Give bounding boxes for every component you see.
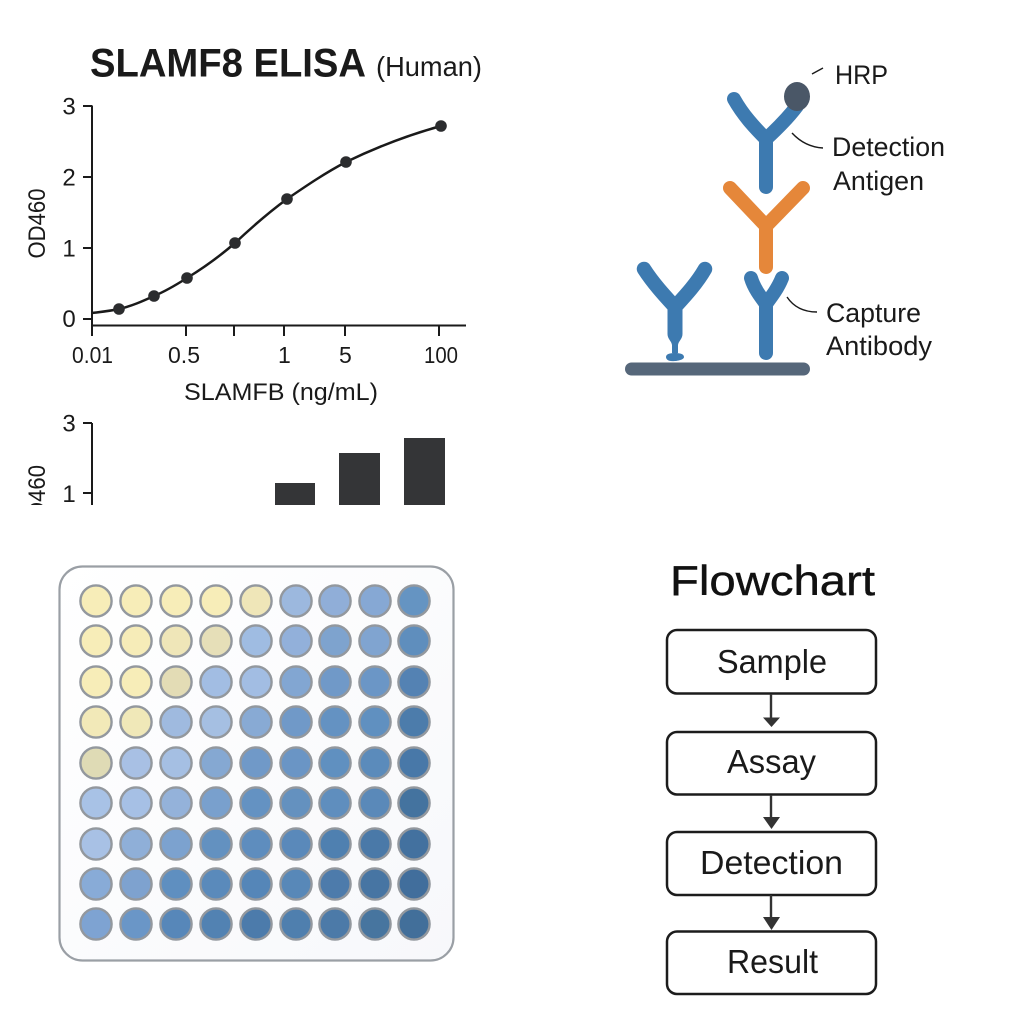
x axis xyxy=(92,326,466,336)
title: SLAMF8 ELISA xyxy=(90,42,366,86)
step: Assay xyxy=(667,732,876,794)
label: Detection Antigen xyxy=(792,132,945,196)
antigen xyxy=(730,188,803,267)
label: HRP xyxy=(812,60,888,90)
step: Result: Result xyxy=(727,943,818,980)
line chart: standard curve xyxy=(24,94,466,406)
y tick labels: 3 xyxy=(62,94,76,120)
y axis xyxy=(83,106,92,336)
arrow: Detection to Result xyxy=(763,895,780,930)
label: Capture Antibody: Antibody xyxy=(826,331,933,361)
label: Capture Antibody xyxy=(787,297,933,361)
label: Detection Antigen: Detection xyxy=(832,132,945,162)
y tick labels: 1 xyxy=(62,236,76,262)
label: Capture Antibody: Capture xyxy=(826,298,921,328)
label: HRP: HRP xyxy=(835,60,888,90)
bar chart tick labels: 3 xyxy=(62,410,76,438)
title: (Human) xyxy=(376,51,482,82)
x tick labels: 5 xyxy=(339,342,352,368)
bars xyxy=(275,438,445,505)
x axis title: SLAMFB (ng/mL) xyxy=(184,379,378,406)
x tick labels: 0.5 xyxy=(168,342,200,368)
immobilised capture antibody xyxy=(644,269,705,361)
x tick labels: 100 xyxy=(424,342,458,368)
bar chart: cropped xyxy=(28,414,445,505)
step: Assay: Assay xyxy=(727,743,816,780)
bar chart tick labels xyxy=(63,414,75,502)
x tick labels: 0.01 xyxy=(72,342,113,368)
label: Detection Antigen: Antigen xyxy=(833,166,924,196)
curve xyxy=(92,126,441,313)
96-well plate xyxy=(60,566,454,960)
HRP enzyme xyxy=(784,82,810,111)
y tick labels: 2 xyxy=(62,164,76,192)
capture antibody xyxy=(751,278,782,353)
step: Sample: Sample xyxy=(717,643,827,680)
sandwich ELISA diagram xyxy=(625,60,945,376)
wells xyxy=(80,585,430,940)
data points xyxy=(113,120,447,315)
arrow: Sample to Assay xyxy=(763,694,780,727)
y axis title: OD460 xyxy=(24,188,51,258)
bar chart y axis title: OD460 xyxy=(24,465,51,535)
plate surface xyxy=(625,362,810,376)
flowchart heading: Flowchart xyxy=(670,557,875,604)
step: Result xyxy=(667,932,876,994)
step: Detection: Detection xyxy=(700,845,843,882)
x tick labels: 1 xyxy=(278,342,291,368)
x tick labels xyxy=(72,342,458,368)
step: Detection xyxy=(667,832,876,895)
flowchart xyxy=(667,557,876,994)
arrow: Assay to Detection xyxy=(763,795,780,829)
bar chart axis xyxy=(83,423,92,505)
detection antibody xyxy=(734,99,797,187)
y tick labels xyxy=(62,94,76,333)
bar chart tick labels: 1 xyxy=(62,481,76,508)
plate body xyxy=(60,566,454,960)
y tick labels: 0 xyxy=(62,306,76,333)
step: Sample xyxy=(667,630,876,694)
